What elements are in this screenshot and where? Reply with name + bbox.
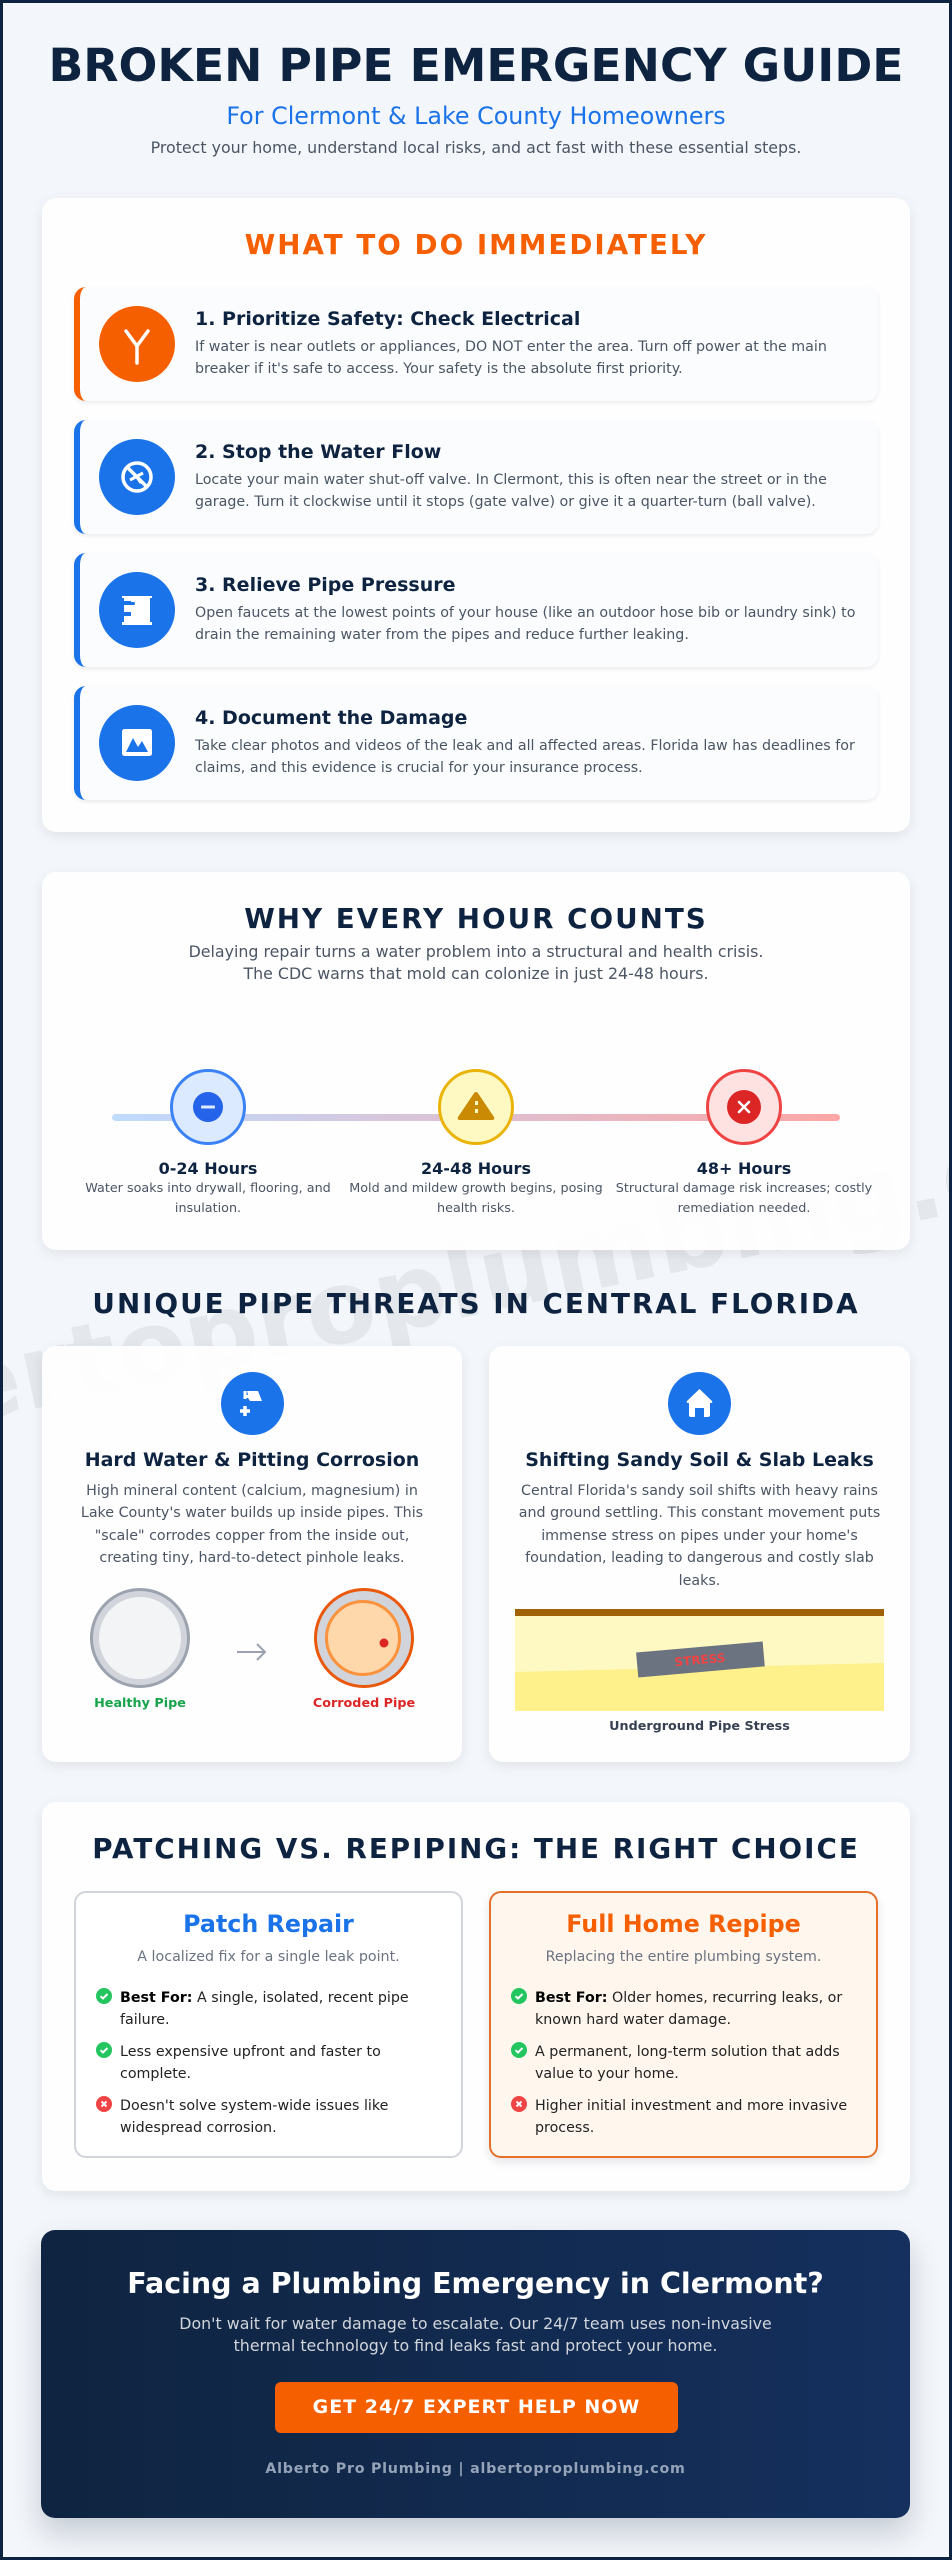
panel: why every hour counts xyxy=(42,872,910,1250)
step 2 card xyxy=(74,420,878,534)
step 4 description: claims, and this evidence is crucial for your insurance process. xyxy=(195,760,643,776)
icon: water drops xyxy=(221,1372,284,1435)
icon: check xyxy=(511,2042,527,2058)
heading: patching vs repiping: PATCHING VS. REPIPING: THE RIGHT CHOICE xyxy=(92,1832,860,1865)
patch repair subtitle: A localized fix for a single leak point. xyxy=(137,1949,400,1965)
arrow: healthy to corroded xyxy=(237,1643,266,1661)
step 2 description: garage. Turn it clockwise until it stops (gate valve) or give it a quarter-turn (ball valve). xyxy=(195,494,816,510)
panel: patching vs repiping xyxy=(42,1802,910,2191)
patch item 2: Less expensive upfront and faster to xyxy=(120,2044,381,2060)
icon: check xyxy=(511,1988,527,2004)
repipe item 3: Higher initial investment and more invasive xyxy=(535,2098,847,2114)
cta text xyxy=(179,2314,772,2355)
text: 24-48 hours: Mold and mildew growth begins, posing xyxy=(349,1181,603,1196)
panel: what to do immediately xyxy=(42,198,910,832)
repipe item 3: process. xyxy=(535,2120,594,2136)
patch repair title: Patch Repair xyxy=(183,1910,354,1938)
step 1 card xyxy=(74,287,878,401)
repipe item 2 xyxy=(535,2044,840,2082)
text: hard water: High mineral content (calcium, magnesium) in xyxy=(86,1483,418,1499)
icon: house xyxy=(668,1372,731,1435)
cta text: thermal technology to find leaks fast and protect your home. xyxy=(234,2336,717,2355)
intro text: Delaying repair turns a water problem into a structural and health crisis. xyxy=(189,942,763,961)
icon: check xyxy=(96,1988,112,2004)
step 4 description xyxy=(194,738,855,776)
panel: sandy soil xyxy=(489,1346,910,1762)
panel: hard water xyxy=(42,1346,462,1762)
heading: what to do immediately: WHAT TO DO IMMEDIATELY xyxy=(245,228,707,261)
icon: photo xyxy=(99,705,175,781)
text: sandy soil: Central Florida's sandy soil shifts with heavy rains xyxy=(521,1483,878,1499)
patch repair list: failure. xyxy=(120,2012,170,2028)
patch repair list: Best For: A single, isolated, recent pipe xyxy=(120,1990,409,2006)
step 3 description: Open faucets at the lowest points of your house (like an outdoor hose bib or laundry sink) to xyxy=(195,605,855,621)
text: 48+ hours: remediation needed. xyxy=(678,1200,810,1216)
repipe title: Full Home Repipe xyxy=(566,1910,801,1938)
cta button xyxy=(275,2382,678,2433)
icon: valve xyxy=(99,439,175,515)
patch repair list xyxy=(120,1990,409,2028)
text: 48+ hours xyxy=(616,1181,872,1216)
cta heading: Facing a Plumbing Emergency in Clermont? xyxy=(127,2267,824,2300)
option: full home repipe xyxy=(489,1891,878,2158)
icon: safety xyxy=(99,306,175,382)
patch item 3: widespread corrosion. xyxy=(120,2120,277,2136)
cta button: GET 24/7 EXPERT HELP NOW xyxy=(313,2396,640,2418)
heading: why every hour counts: WHY EVERY HOUR COUNTS xyxy=(244,902,708,935)
icon: check xyxy=(96,2042,112,2058)
step 1 description: If water is near outlets or appliances, DO NOT enter the area. Turn off power at the main xyxy=(195,339,827,355)
text: sandy soil xyxy=(519,1483,880,1589)
icon: cross xyxy=(96,2096,112,2112)
intro text xyxy=(189,942,763,983)
intro text: The CDC warns that mold can colonize in just 24-48 hours. xyxy=(243,964,709,983)
step 1 description xyxy=(195,339,827,377)
text: 24-48 hours: health risks. xyxy=(437,1200,515,1216)
timeline bar xyxy=(112,1114,840,1121)
footer brand: Alberto Pro Plumbing | albertoproplumbing.com xyxy=(265,2461,686,2477)
subtitle: For Clermont & Lake County Homeowners xyxy=(226,102,726,130)
text: 48+ hours: Structural damage risk increases; costly xyxy=(616,1181,872,1196)
patch item 2: complete. xyxy=(120,2066,191,2082)
timeline node 3 xyxy=(706,1069,782,1145)
step 2 description xyxy=(195,472,827,510)
patch item 3 xyxy=(120,2098,388,2136)
label: corroded pipe: Corroded Pipe xyxy=(313,1696,415,1711)
heading: hard water: Hard Water & Pitting Corrosion xyxy=(85,1449,419,1471)
step 3 description: drain the remaining water from the pipes and reduce further leaking. xyxy=(195,627,689,643)
timeline node 1 xyxy=(170,1069,246,1145)
icon: cross xyxy=(511,2096,527,2112)
step 3 description xyxy=(195,605,855,643)
text: hard water: creating tiny, hard-to-detect pinhole leaks. xyxy=(99,1550,405,1566)
text: sandy soil: and ground settling. This constant movement puts xyxy=(519,1505,880,1521)
step 4 description: Take clear photos and videos of the leak and all affected areas. Florida law has deadlines for xyxy=(195,738,855,754)
diagram: healthy pipe xyxy=(90,1588,190,1688)
text: sandy soil: immense stress on pipes under your home's xyxy=(541,1528,858,1544)
step 1 title: 1. Prioritize Safety: Check Electrical xyxy=(195,308,580,330)
label: healthy pipe: Healthy Pipe xyxy=(94,1696,186,1711)
title: BROKEN PIPE EMERGENCY GUIDE xyxy=(48,39,904,92)
diagram: underground pipe stress xyxy=(515,1609,884,1711)
step 2 description: Locate your main water shut-off valve. In Clermont, this is often near the street or in the xyxy=(195,472,827,488)
step 1 description: breaker if it's safe to access. Your safety is the absolute first priority. xyxy=(195,361,683,377)
step 4 card xyxy=(74,686,878,800)
cta text: Don't wait for water damage to escalate. Our 24/7 team uses non-invasive xyxy=(179,2314,772,2333)
label: 24-48 hours: 24-48 Hours xyxy=(421,1159,531,1178)
diagram: underground pipe stress: STRESS xyxy=(674,1651,726,1669)
icon: faucet xyxy=(99,572,175,648)
repipe item 2: A permanent, long-term solution that adds xyxy=(535,2044,840,2060)
heading: unique pipe threats: UNIQUE PIPE THREATS IN CENTRAL FLORIDA xyxy=(92,1287,860,1320)
repipe item 3 xyxy=(535,2098,847,2136)
step 4 title: 4. Document the Damage xyxy=(195,707,467,729)
text: sandy soil: leaks. xyxy=(679,1573,720,1589)
caption: underground pipe stress: Underground Pipe Stress xyxy=(609,1719,790,1734)
timeline node 2 xyxy=(438,1069,514,1145)
heading: sandy soil: Shifting Sandy Soil & Slab Leaks xyxy=(525,1449,874,1471)
step 3 title: 3. Relieve Pipe Pressure xyxy=(195,574,456,596)
label: 0-24 hours: 0-24 Hours xyxy=(159,1159,257,1178)
text: 0-24 hours: Water soaks into drywall, flooring, and xyxy=(85,1181,331,1196)
label: 48+ hours: 48+ Hours xyxy=(697,1159,791,1178)
panel: call to action xyxy=(41,2230,910,2518)
repipe item 1 xyxy=(535,1990,842,2028)
text: sandy soil: foundation, leading to dangerous and costly slab xyxy=(525,1550,874,1566)
text: hard water: Lake County's water builds up inside pipes. This xyxy=(81,1505,423,1521)
repipe item 1: known hard water damage. xyxy=(535,2012,731,2028)
text: hard water: "scale" corrodes copper from the inside out, xyxy=(95,1528,409,1544)
diagram: corroded pipe xyxy=(314,1588,414,1688)
repipe item 1: Best For: Older homes, recurring leaks, or xyxy=(535,1990,842,2006)
step 3 card xyxy=(74,553,878,667)
repipe subtitle: Replacing the entire plumbing system. xyxy=(546,1949,821,1965)
repipe item 2: value to your home. xyxy=(535,2066,679,2082)
step 2 title: 2. Stop the Water Flow xyxy=(195,441,441,463)
text: hard water xyxy=(81,1483,423,1566)
text: 0-24 hours xyxy=(85,1181,331,1216)
tagline: Protect your home, understand local risks, and act fast with these essential steps. xyxy=(151,138,801,157)
text: 24-48 hours xyxy=(349,1181,603,1216)
patch item 2 xyxy=(120,2044,381,2082)
patch item 3: Doesn't solve system-wide issues like xyxy=(120,2098,388,2114)
text: 0-24 hours: insulation. xyxy=(175,1200,241,1216)
option: patch repair xyxy=(74,1891,463,2158)
